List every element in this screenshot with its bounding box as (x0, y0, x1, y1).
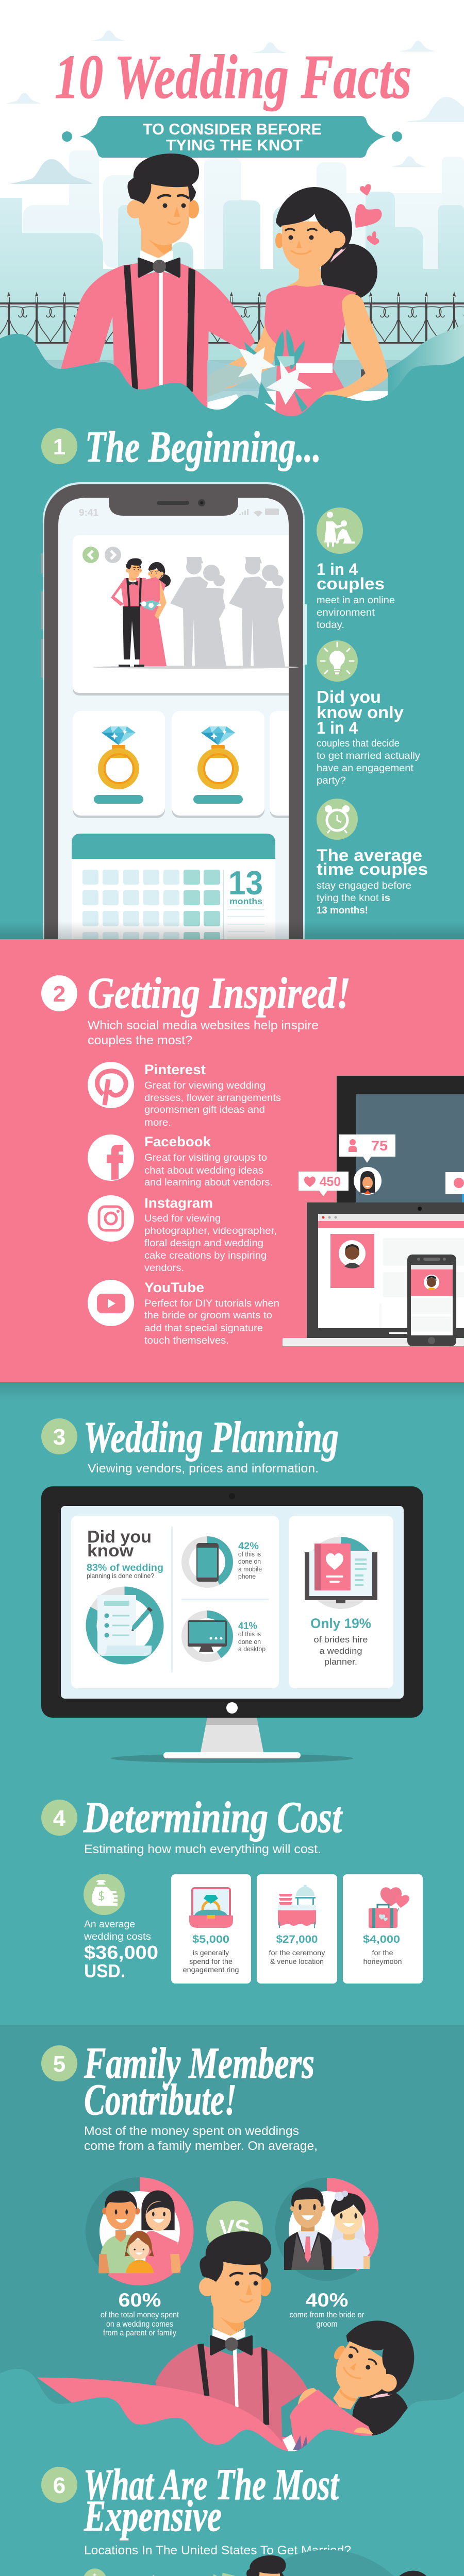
panel: online planning: a desktop (238, 1646, 266, 1653)
section 3 heading: Viewing vendors, prices and information. (88, 1462, 319, 1476)
panel: online planning: 42% (238, 1541, 259, 1552)
avatar: woman (354, 1167, 382, 1195)
section 2 heading: couples the most? (88, 1033, 192, 1047)
section 2 heading: 2 (53, 981, 65, 1007)
section 3 heading: 3 (53, 1425, 65, 1450)
phone mockup (41, 482, 307, 999)
family percentage: 60% (119, 2290, 161, 2311)
section 5 heading: Family Members (84, 2038, 314, 2088)
hero skyline and clouds (0, 30, 464, 367)
icon: instagram (88, 1195, 134, 1242)
section 6 heading: What Are The Most (84, 2460, 340, 2509)
average wedding cost: An average (84, 1919, 135, 1930)
calendar card: months (229, 896, 262, 906)
fact: engagement length: tying the knot is (317, 893, 390, 904)
phone mockup: 9:41 (79, 507, 98, 518)
section 5 heading: 5 (53, 2052, 65, 2077)
section 1 heading (41, 422, 321, 471)
section 5 heading (41, 2038, 318, 2153)
fact: online couples: couples (317, 574, 385, 593)
list: expensive locations (84, 2569, 189, 2576)
average wedding cost (84, 1874, 158, 1981)
bubble: likes: 450 (320, 1175, 341, 1189)
fact: online couples (317, 507, 395, 631)
Pinterest: groomsmen gift ideas and (144, 1105, 265, 1115)
donut: 41 percent (186, 1615, 229, 1658)
subtitle ribbon: TYING THE KNOT (166, 136, 303, 154)
section 2 panel (0, 939, 464, 1382)
YouTube (88, 1280, 279, 1346)
card: engagement ring cost: spend for the (189, 1957, 233, 1965)
subtitle ribbon (62, 116, 402, 158)
fact: engagement party: 1 in 4 (317, 718, 358, 737)
icon: proposal (317, 507, 363, 554)
average wedding cost: $36,000 (84, 1942, 158, 1963)
couple percentage: 40% (305, 2290, 349, 2311)
small couple (111, 558, 171, 667)
icon: ring box (189, 1887, 233, 1928)
fact: online couples: environment (317, 607, 375, 618)
ground strip (0, 360, 464, 391)
teal background: sections 3 and 4 (0, 1382, 464, 2025)
background: hero sky (0, 0, 464, 412)
teal background: section 1 (0, 567, 464, 939)
bubble: followers (339, 1134, 395, 1163)
panel: wedding planner: Only 19% (310, 1616, 371, 1631)
Instagram: Used for viewing (144, 1213, 221, 1224)
laptop (283, 1202, 464, 1346)
icon: catering table (278, 1885, 316, 1928)
calendar card: 13 (228, 864, 263, 902)
section 2 heading: Which social media websites help inspire (88, 1019, 319, 1032)
calendar card (72, 834, 275, 952)
illustration: bride (207, 184, 388, 420)
section 5 panel (0, 2025, 464, 2437)
Pinterest: Pinterest (144, 1062, 206, 1077)
fact: engagement party: couples that decide (317, 738, 400, 749)
Pinterest: Great for viewing wedding (144, 1080, 266, 1091)
section 3 heading (41, 1412, 339, 1476)
section 4 heading: 4 (53, 1806, 66, 1831)
section 1 heading: 1 (53, 434, 65, 460)
card: ceremony cost (257, 1874, 337, 1984)
family percentage: from a parent or family (103, 2329, 176, 2337)
section 6 heading: Expensive (84, 2491, 222, 2540)
card: engagement ring cost: engagement ring (183, 1965, 239, 1974)
section 6 heading: Locations In The United States To Get Married? (84, 2544, 351, 2557)
panel: online planning (71, 1516, 279, 1688)
fact: engagement length: 13 months! (317, 905, 368, 916)
donut: 42 percent (186, 1540, 229, 1584)
card: honeymoon cost: $4,000 (363, 1934, 400, 1945)
card: ring (172, 711, 289, 818)
YouTube: Perfect for DIY tutorials when (144, 1298, 279, 1309)
fact: engagement party: party? (317, 775, 346, 786)
section 1 heading: The Beginning... (85, 422, 321, 471)
panel: online planning: planning is done online? (87, 1572, 154, 1580)
phone (407, 1255, 456, 1346)
card: ceremony cost: $27,000 (276, 1934, 318, 1945)
Facebook: chat about wedding ideas (144, 1165, 263, 1176)
Pinterest: more. (144, 1117, 171, 1128)
panel: wedding planner: a wedding (320, 1646, 362, 1656)
fact: online couples: 1 in 4 (317, 560, 358, 579)
panel: online planning: 41% (238, 1621, 257, 1632)
bubble: likes (299, 1172, 349, 1196)
Instagram (88, 1195, 277, 1274)
card: engagement ring cost: $5,000 (192, 1934, 229, 1945)
panel: online planning: know (87, 1541, 134, 1560)
section 4 heading: Estimating how much everything will cost. (84, 1842, 321, 1856)
average wedding cost: wedding costs (84, 1931, 151, 1942)
panel: online planning: of this is (238, 1631, 261, 1638)
illustration: groom (61, 154, 255, 420)
Instagram: photographer, videographer, (144, 1226, 277, 1236)
fact: engagement party: have an engagement (317, 763, 414, 774)
fact: engagement length (317, 799, 428, 916)
donut: family 60 percent (86, 2177, 194, 2285)
fact: engagement length: time couples (317, 860, 428, 878)
Facebook (88, 1134, 273, 1188)
Facebook: and learning about vendors. (144, 1177, 273, 1188)
fact: engagement party: know only (317, 703, 404, 722)
VS badge (206, 2201, 263, 2258)
YouTube: add that special signature (144, 1323, 263, 1334)
panel: online planning: phone (238, 1573, 256, 1580)
back bush (388, 324, 464, 412)
icon: facebook (88, 1134, 134, 1181)
card: engagement ring cost: is generally (193, 1948, 229, 1957)
fence (0, 292, 464, 359)
bubble: followers: 75 (371, 1138, 388, 1154)
subtitle ribbon: TO CONSIDER BEFORE (143, 120, 322, 138)
Facebook: Great for visiting groups to (144, 1153, 267, 1163)
YouTube: touch themselves. (144, 1335, 229, 1346)
illustration: bouquet (207, 329, 312, 412)
map illustration (213, 2550, 426, 2576)
average wedding cost: USD. (84, 1960, 125, 1981)
icon: alarm clock (317, 799, 358, 840)
teal wave before section 6 (0, 2369, 464, 2576)
donut: couple 40 percent (275, 2178, 378, 2281)
section 3 heading: Wedding Planning (84, 1412, 339, 1462)
fact: engagement length: The average (317, 846, 422, 865)
bubble: comments (445, 1172, 464, 1202)
card: engagement ring cost (171, 1874, 251, 1984)
family percentage: on a wedding comes (106, 2320, 173, 2329)
desktop monitor (41, 1486, 423, 1763)
card: ceremony cost: & venue location (270, 1957, 324, 1965)
panel: online planning: done on (238, 1558, 261, 1565)
New York (84, 2569, 158, 2576)
devices illustration (283, 1076, 464, 1346)
donut: 83 percent (91, 1592, 158, 1659)
card: honeymoon cost: for the (372, 1948, 393, 1957)
Pinterest (88, 1062, 281, 1128)
panel: online planning: done on (238, 1638, 261, 1646)
card: honeymoon cost: honeymoon (363, 1957, 402, 1965)
section 4 heading: Determining Cost (83, 1792, 343, 1842)
panel: wedding planner: of brides hire (313, 1635, 368, 1645)
section 6 heading: 6 (53, 2473, 65, 2498)
card: couple carousel (73, 535, 299, 696)
Pinterest: dresses, flower arrangements (144, 1093, 281, 1104)
section 2 heading: Getting Inspired! (88, 968, 351, 1018)
Instagram: floral design and wedding (144, 1238, 263, 1249)
fact: engagement party (317, 640, 421, 786)
Instagram: cake creations by inspiring (144, 1250, 267, 1261)
section 5 heading: Contribute! (84, 2075, 237, 2124)
icon: light bulb (317, 640, 358, 682)
fact: engagement length: stay engaged before (317, 880, 411, 891)
panel: online planning: of this is (238, 1551, 261, 1558)
section 5 heading: Most of the money spent on weddings (84, 2124, 299, 2138)
icon: youtube (88, 1280, 134, 1326)
VS badge: VS (219, 2215, 250, 2243)
card: ceremony cost: for the ceremony (269, 1948, 325, 1957)
section 5 heading: come from a family member. On average, (84, 2139, 318, 2153)
family illustration (98, 2190, 181, 2273)
couple percentage: come from the bride or (290, 2311, 364, 2319)
Instagram: Instagram (144, 1195, 213, 1211)
card: ring (73, 711, 165, 818)
section 4 heading (41, 1792, 343, 1856)
couple percentage: groom (317, 2320, 337, 2329)
icon: money bag (84, 1874, 125, 1915)
section 6 heading (41, 2460, 351, 2557)
YouTube: YouTube (144, 1280, 204, 1295)
teal wave under hero (0, 334, 464, 576)
section 2 heading (41, 968, 351, 1047)
fact: online couples: meet in an online (317, 595, 395, 606)
icon: pinterest (88, 1062, 134, 1108)
map: United States (200, 2573, 464, 2576)
panel: online planning: a mobile (238, 1566, 262, 1573)
couple percentage (290, 2290, 364, 2329)
fact: engagement party: Did you (317, 687, 381, 706)
panel: online planning: 83% of wedding (87, 1563, 163, 1573)
icon: suitcase and balloons (369, 1887, 409, 1928)
family percentage: of the total money spent (101, 2311, 179, 2319)
Facebook: Facebook (144, 1134, 211, 1149)
fact: online couples: today. (317, 620, 344, 631)
family percentage (101, 2290, 179, 2337)
panel: online planning: Did you (87, 1527, 152, 1546)
Instagram: vendors. (144, 1263, 184, 1274)
panel: wedding planner: planner. (324, 1657, 357, 1667)
YouTube: the bride or groom wants to (144, 1310, 272, 1321)
illustration: groom and bride with veil (37, 2231, 451, 2458)
fact: engagement party: to get married actually (317, 751, 421, 761)
panel: wedding planner (289, 1516, 393, 1688)
card: honeymoon cost (343, 1874, 423, 1984)
